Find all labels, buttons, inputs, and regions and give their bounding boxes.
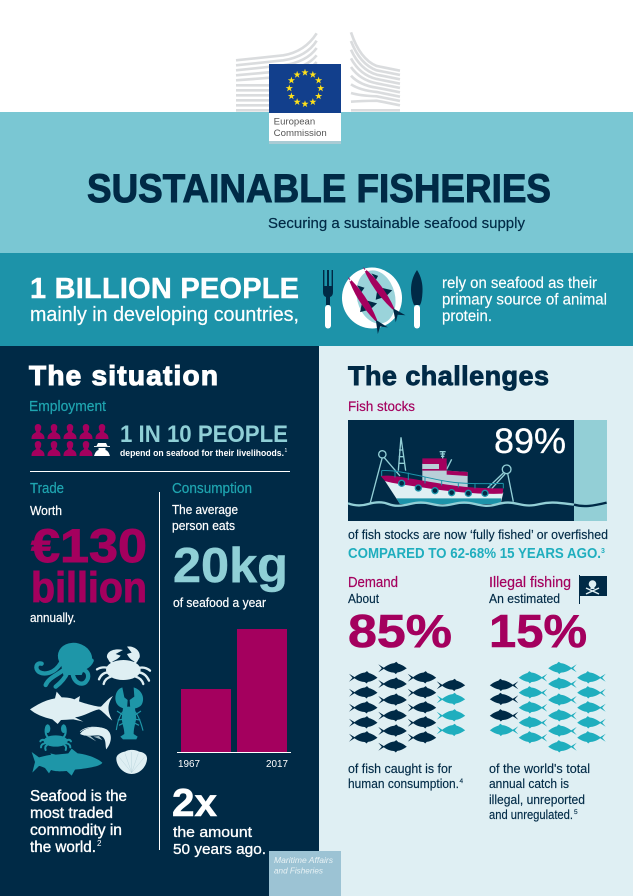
text: worth: Worth bbox=[30, 504, 62, 518]
banner headline bbox=[30, 273, 299, 326]
banner text right: rely on seafood as their bbox=[442, 275, 597, 292]
text: the average person eats: The average bbox=[172, 503, 238, 517]
icon: people row, one in ten bbox=[32, 424, 110, 456]
logo text bbox=[274, 116, 327, 139]
text: most traded commodity: most traded bbox=[30, 805, 113, 822]
subtitle: Securing a sustainable seafood supply bbox=[268, 215, 525, 232]
logo text: European bbox=[274, 116, 315, 128]
text: the amount 50 years ago: the amount bbox=[173, 825, 252, 841]
text: annually: annually. bbox=[30, 611, 76, 625]
heading: fish stocks: Fish stocks bbox=[348, 398, 415, 414]
stat: 1 in 10 people: depend on seafood for their livelihoods. bbox=[120, 448, 284, 459]
banner headline: mainly in developing countries, bbox=[30, 304, 299, 326]
text: most traded commodity: Seafood is the bbox=[30, 788, 127, 805]
text: the amount 50 years ago bbox=[173, 825, 266, 858]
text: illegal unreported unregulated: 5 bbox=[574, 809, 578, 816]
stat: 15%: 15% bbox=[489, 605, 587, 657]
icon: waves bbox=[348, 502, 574, 506]
icon: tuna bbox=[30, 692, 113, 724]
panel: the challenges bbox=[348, 361, 608, 822]
bar chart: consumption: 2017 bbox=[266, 759, 288, 770]
text: the average person eats bbox=[172, 503, 238, 533]
text: about: About bbox=[348, 592, 379, 606]
text: compared to 15 years ago: COMPARED TO 62-68% 15 YEARS AGO. bbox=[348, 546, 601, 562]
fish stocks graphic: trawler and 89% bbox=[348, 420, 607, 521]
text: illegal unreported unregulated: annual catch is bbox=[489, 776, 569, 791]
footer tag: Maritime Affairs and Fisheries bbox=[269, 851, 341, 896]
stat: 89%: 89% bbox=[494, 422, 566, 461]
text: of fish caught bbox=[348, 761, 464, 791]
stat: 130 billion euros: billion bbox=[31, 564, 147, 612]
icon: pirate flag bbox=[579, 575, 607, 604]
icon: crab large bbox=[97, 646, 150, 684]
icon: scallop shell bbox=[116, 750, 147, 774]
footer tag: Maritime Affairs and Fisheries: and Fisheries bbox=[274, 866, 323, 876]
icons: seafood creatures bbox=[30, 639, 150, 776]
stat: 1 in 10 people bbox=[120, 421, 288, 459]
footer tag: Maritime Affairs and Fisheries: Maritime Affairs bbox=[274, 856, 333, 865]
text: most traded commodity: 2 bbox=[97, 839, 102, 848]
stat: 1 in 10 people: 1 IN 10 PEOPLE bbox=[120, 421, 288, 448]
text: most traded commodity: commodity in bbox=[30, 822, 122, 839]
heading: consumption: Consumption bbox=[172, 481, 252, 497]
icon: lobster bbox=[115, 687, 143, 739]
bar chart: consumption bbox=[177, 629, 291, 770]
logo text: Commission bbox=[274, 128, 327, 139]
icon: octopus bbox=[36, 639, 95, 687]
banner text right: protein. bbox=[442, 308, 492, 325]
text: the amount 50 years ago: 50 years ago. bbox=[173, 842, 266, 858]
stat: 1 in 10 people: 1 bbox=[284, 448, 288, 454]
text: of fish caught: of fish caught is for bbox=[348, 761, 453, 776]
heading: employment: Employment bbox=[29, 399, 106, 415]
heading: the challenges: The challenges bbox=[348, 361, 549, 391]
banner headline: 1 BILLION PEOPLE bbox=[30, 273, 299, 305]
text: most traded commodity bbox=[30, 788, 127, 856]
icon: fish A bbox=[356, 261, 409, 324]
text: illegal unreported unregulated bbox=[489, 761, 590, 822]
icon: shadow bbox=[269, 141, 341, 144]
icon: shrimp bbox=[80, 727, 111, 749]
icon: salmon bbox=[32, 749, 102, 776]
icon: knife bbox=[411, 270, 423, 328]
pictogram: 85 percent fish bbox=[349, 662, 465, 753]
text: an estimated: An estimated bbox=[489, 592, 560, 606]
icon: fish B bbox=[340, 272, 391, 336]
logo: European Commission building and flag bbox=[236, 32, 400, 144]
stat: 2x: 2x bbox=[172, 782, 217, 825]
heading: demand: Demand bbox=[348, 575, 398, 591]
text: of seafood a year: of seafood a year bbox=[173, 595, 267, 610]
title: SUSTAINABLE FISHERIES bbox=[87, 167, 551, 211]
text: fully fished or overfished: of fish stocks are now ‘fully fished’ or overfished bbox=[348, 527, 608, 542]
text: illegal unreported unregulated: of the world's total bbox=[489, 761, 590, 776]
stat: 130 billion euros: €130 bbox=[31, 519, 147, 572]
banner text right bbox=[442, 275, 607, 325]
text: the average person eats: person eats bbox=[172, 519, 235, 533]
icon: EU flag bbox=[269, 64, 341, 113]
text: illegal unreported unregulated: illegal, unreported bbox=[489, 792, 585, 807]
text: illegal unreported unregulated: and unregulated. bbox=[489, 807, 573, 822]
stat: 20kg: 20kg bbox=[173, 539, 288, 593]
icon: Berlaymont building bbox=[236, 32, 400, 110]
icon: plate of fish with fork and knife bbox=[323, 261, 423, 336]
icon: trawler bbox=[348, 437, 607, 506]
icon: fork bbox=[323, 270, 333, 328]
text: most traded commodity: the world. bbox=[30, 839, 96, 856]
text: of fish caught: 4 bbox=[460, 778, 464, 785]
icon: plate bbox=[337, 263, 407, 333]
text: compared to 15 years ago: 3 bbox=[601, 548, 605, 555]
icon: white label box bbox=[269, 112, 341, 141]
heading: trade: Trade bbox=[30, 481, 64, 497]
pictogram: 15 percent fish bbox=[490, 662, 606, 753]
bar chart: consumption: 1967 bbox=[178, 759, 200, 770]
stat: 85%: 85% bbox=[348, 605, 452, 657]
heading: the situation: The situation bbox=[29, 360, 218, 391]
heading: illegal fishing: Illegal fishing bbox=[489, 575, 571, 591]
stat: 130 billion euros bbox=[31, 519, 147, 612]
text: of fish caught: human consumption. bbox=[348, 776, 459, 791]
panel: the situation bbox=[29, 360, 291, 858]
banner text right: primary source of animal bbox=[442, 292, 607, 308]
icon: small crab bbox=[40, 724, 71, 750]
